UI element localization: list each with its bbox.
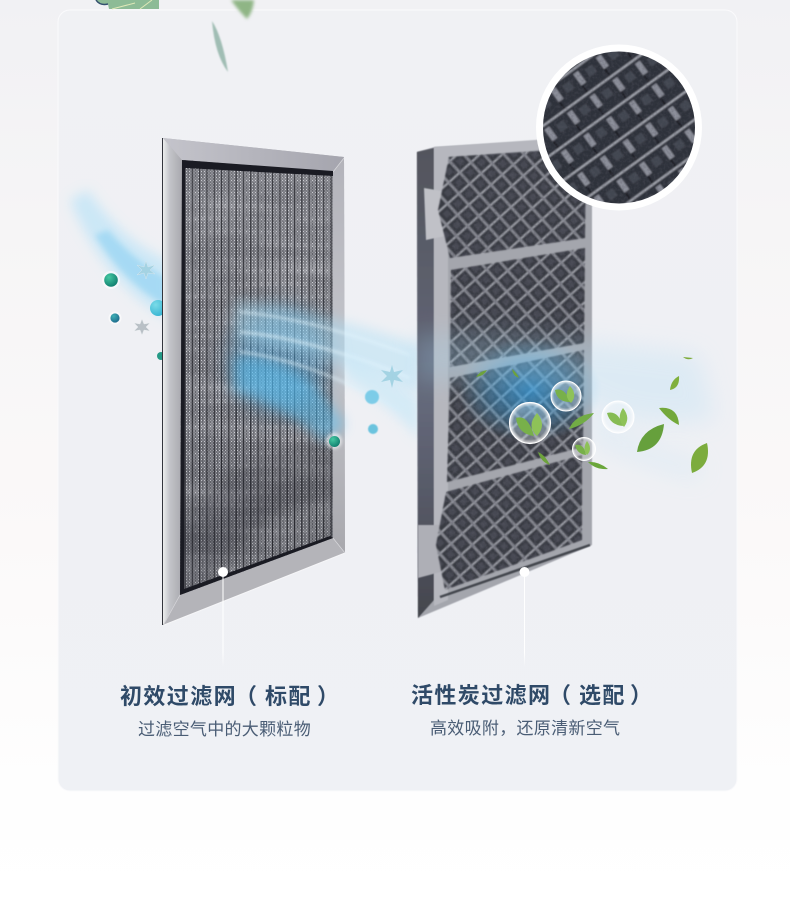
filter metal frame <box>163 138 345 625</box>
icon: bubble top <box>551 381 581 411</box>
icon: bubble large <box>510 402 550 444</box>
heading: primary filter: ） <box>317 684 340 709</box>
heading: carbon filter: ） <box>630 683 653 708</box>
icon: loose leaves <box>476 357 708 473</box>
blurred falling leaves <box>212 0 254 72</box>
caption: carbon filter: 高效吸附，还原清新空气 <box>430 719 620 738</box>
heading: primary filter: （ <box>235 684 258 709</box>
airflow: incoming wind arc on the left <box>70 190 170 320</box>
filter mesh <box>180 158 335 598</box>
icon: star particle lower <box>134 319 150 335</box>
airflow glow on the carbon filter <box>415 334 715 480</box>
top leaf peeking above the panel <box>96 0 159 9</box>
particles between filters <box>326 365 403 449</box>
heading: carbon filter: 活性炭过滤网 <box>411 683 551 708</box>
magnified mesh circle <box>536 44 702 210</box>
panel: rounded card <box>58 10 737 791</box>
green leaves and bubbles <box>476 357 708 473</box>
leader pin: primary filter <box>218 567 228 667</box>
heading: primary filter: 标配 <box>265 684 312 709</box>
panel: activated carbon filter <box>417 136 592 618</box>
panel: primary filter <box>162 138 345 625</box>
airflow passing through the primary filter <box>230 300 420 442</box>
heading: carbon filter: （ <box>549 683 572 708</box>
carbon mesh cells <box>436 148 586 590</box>
icon: bubble small <box>572 438 596 460</box>
caption: primary filter: 过滤空气中的大颗粒物 <box>138 720 311 739</box>
bottom dark lip <box>440 545 590 597</box>
heading: primary filter: 初效过滤网 <box>120 684 237 709</box>
leader pin: carbon filter <box>520 567 530 667</box>
particles left of the filter <box>102 261 166 360</box>
icon: star particle <box>137 261 155 279</box>
icon: bubble right <box>602 401 634 433</box>
carbon frame body <box>417 138 592 618</box>
mesh dark border <box>180 160 333 595</box>
icon: star particle middle <box>381 365 403 388</box>
heading: carbon filter: 选配 <box>579 683 626 708</box>
mesh speckle <box>440 145 590 595</box>
